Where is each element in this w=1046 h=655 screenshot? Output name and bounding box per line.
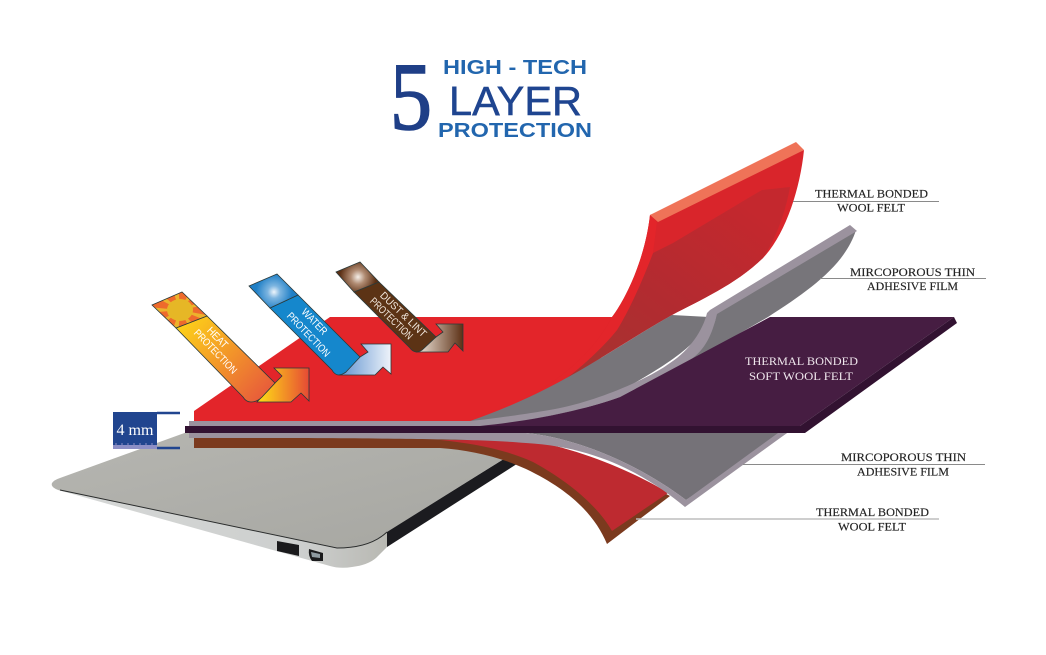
water label: PROTECTION	[284, 310, 332, 360]
label: upper microporous thin adhesive film: MIRCOPOROUS THIN	[850, 265, 975, 279]
dust label: DUST & LINT	[377, 290, 429, 340]
label: bottom thermal bonded wool felt: WOOL FELT	[838, 520, 907, 534]
lower film lilac edge	[189, 433, 787, 507]
label: thermal bonded soft wool felt	[745, 354, 858, 383]
arrow: dust and lint protection	[336, 262, 463, 352]
label: bottom thermal bonded wool felt	[636, 505, 939, 534]
top felt shaded fold	[555, 187, 790, 387]
layer: bottom microporous film	[189, 433, 787, 507]
label: top thermal bonded wool felt: THERMAL BONDED	[815, 186, 928, 200]
title line: high-tech: HIGH - TECH	[443, 57, 587, 79]
water arrow head	[340, 344, 391, 375]
layer: bottom wool felt	[194, 438, 670, 544]
title numeral 5: 5	[390, 43, 432, 150]
lower film grey face	[526, 433, 787, 500]
label: bottom thermal bonded wool felt: THERMAL BONDED	[816, 505, 929, 519]
laptop front lip	[52, 483, 387, 568]
laptop black hinge	[386, 457, 523, 547]
ruler ticks	[113, 445, 157, 449]
upper film lilac edge	[189, 225, 857, 427]
heat label: PROTECTION	[191, 327, 239, 377]
label: top thermal bonded wool felt	[793, 186, 939, 214]
heat arrow head	[257, 368, 309, 402]
heat band	[176, 316, 275, 402]
title	[390, 43, 592, 150]
icon: sun	[152, 292, 206, 328]
icon: water droplet glow	[249, 274, 298, 308]
bottom felt red face	[440, 440, 668, 531]
thickness bracket	[157, 413, 180, 448]
dust arrow head	[417, 324, 463, 352]
soft felt top face	[480, 317, 954, 426]
water band	[270, 295, 360, 375]
icon: dust glow	[336, 262, 379, 292]
top felt raised flap	[470, 150, 804, 421]
label: lower microporous thin adhesive film: MIRCOPOROUS THIN	[841, 450, 966, 464]
upper film grey raised section	[680, 230, 856, 362]
label: lower microporous thin adhesive film: ADHESIVE FILM	[857, 464, 949, 478]
layer: soft wool felt	[185, 317, 957, 433]
upper film grey left section	[470, 315, 709, 421]
dust band	[354, 282, 436, 352]
heat label: HEAT	[204, 325, 231, 351]
top felt flat sheet	[194, 317, 612, 422]
layer: top wool felt	[194, 142, 804, 422]
label: upper microporous thin adhesive film: ADHESIVE FILM	[867, 279, 958, 293]
bottom felt brown edge	[194, 438, 670, 544]
title line: protection: PROTECTION	[438, 120, 592, 142]
top felt orange edge	[650, 142, 804, 222]
water label	[284, 306, 332, 360]
layer: upper microporous film	[189, 225, 857, 427]
label: thermal bonded soft wool felt: SOFT WOOL FELT	[749, 369, 854, 383]
top felt left highlight	[470, 215, 657, 421]
arrow: heat protection	[151, 292, 310, 402]
dust label: PROTECTION	[367, 295, 415, 342]
thickness value: 4 mm	[116, 422, 154, 439]
label: thermal bonded soft wool felt: THERMAL BONDED	[745, 354, 858, 368]
usb port	[277, 541, 299, 556]
arrow: water protection	[249, 274, 391, 375]
label: top thermal bonded wool felt: WOOL FELT	[837, 200, 906, 214]
laptop lid	[52, 431, 510, 548]
title line: layer: LAYER	[449, 78, 582, 124]
laptop seam	[60, 490, 387, 548]
soft felt side strip	[185, 317, 957, 433]
label: upper microporous thin adhesive film	[820, 265, 986, 293]
label: lower microporous thin adhesive film	[743, 450, 985, 478]
laptop	[52, 431, 523, 568]
water label: WATER	[299, 306, 330, 338]
mini display port	[309, 549, 323, 561]
thickness blue box	[113, 412, 157, 449]
callout: 4 mm thickness	[113, 412, 180, 449]
